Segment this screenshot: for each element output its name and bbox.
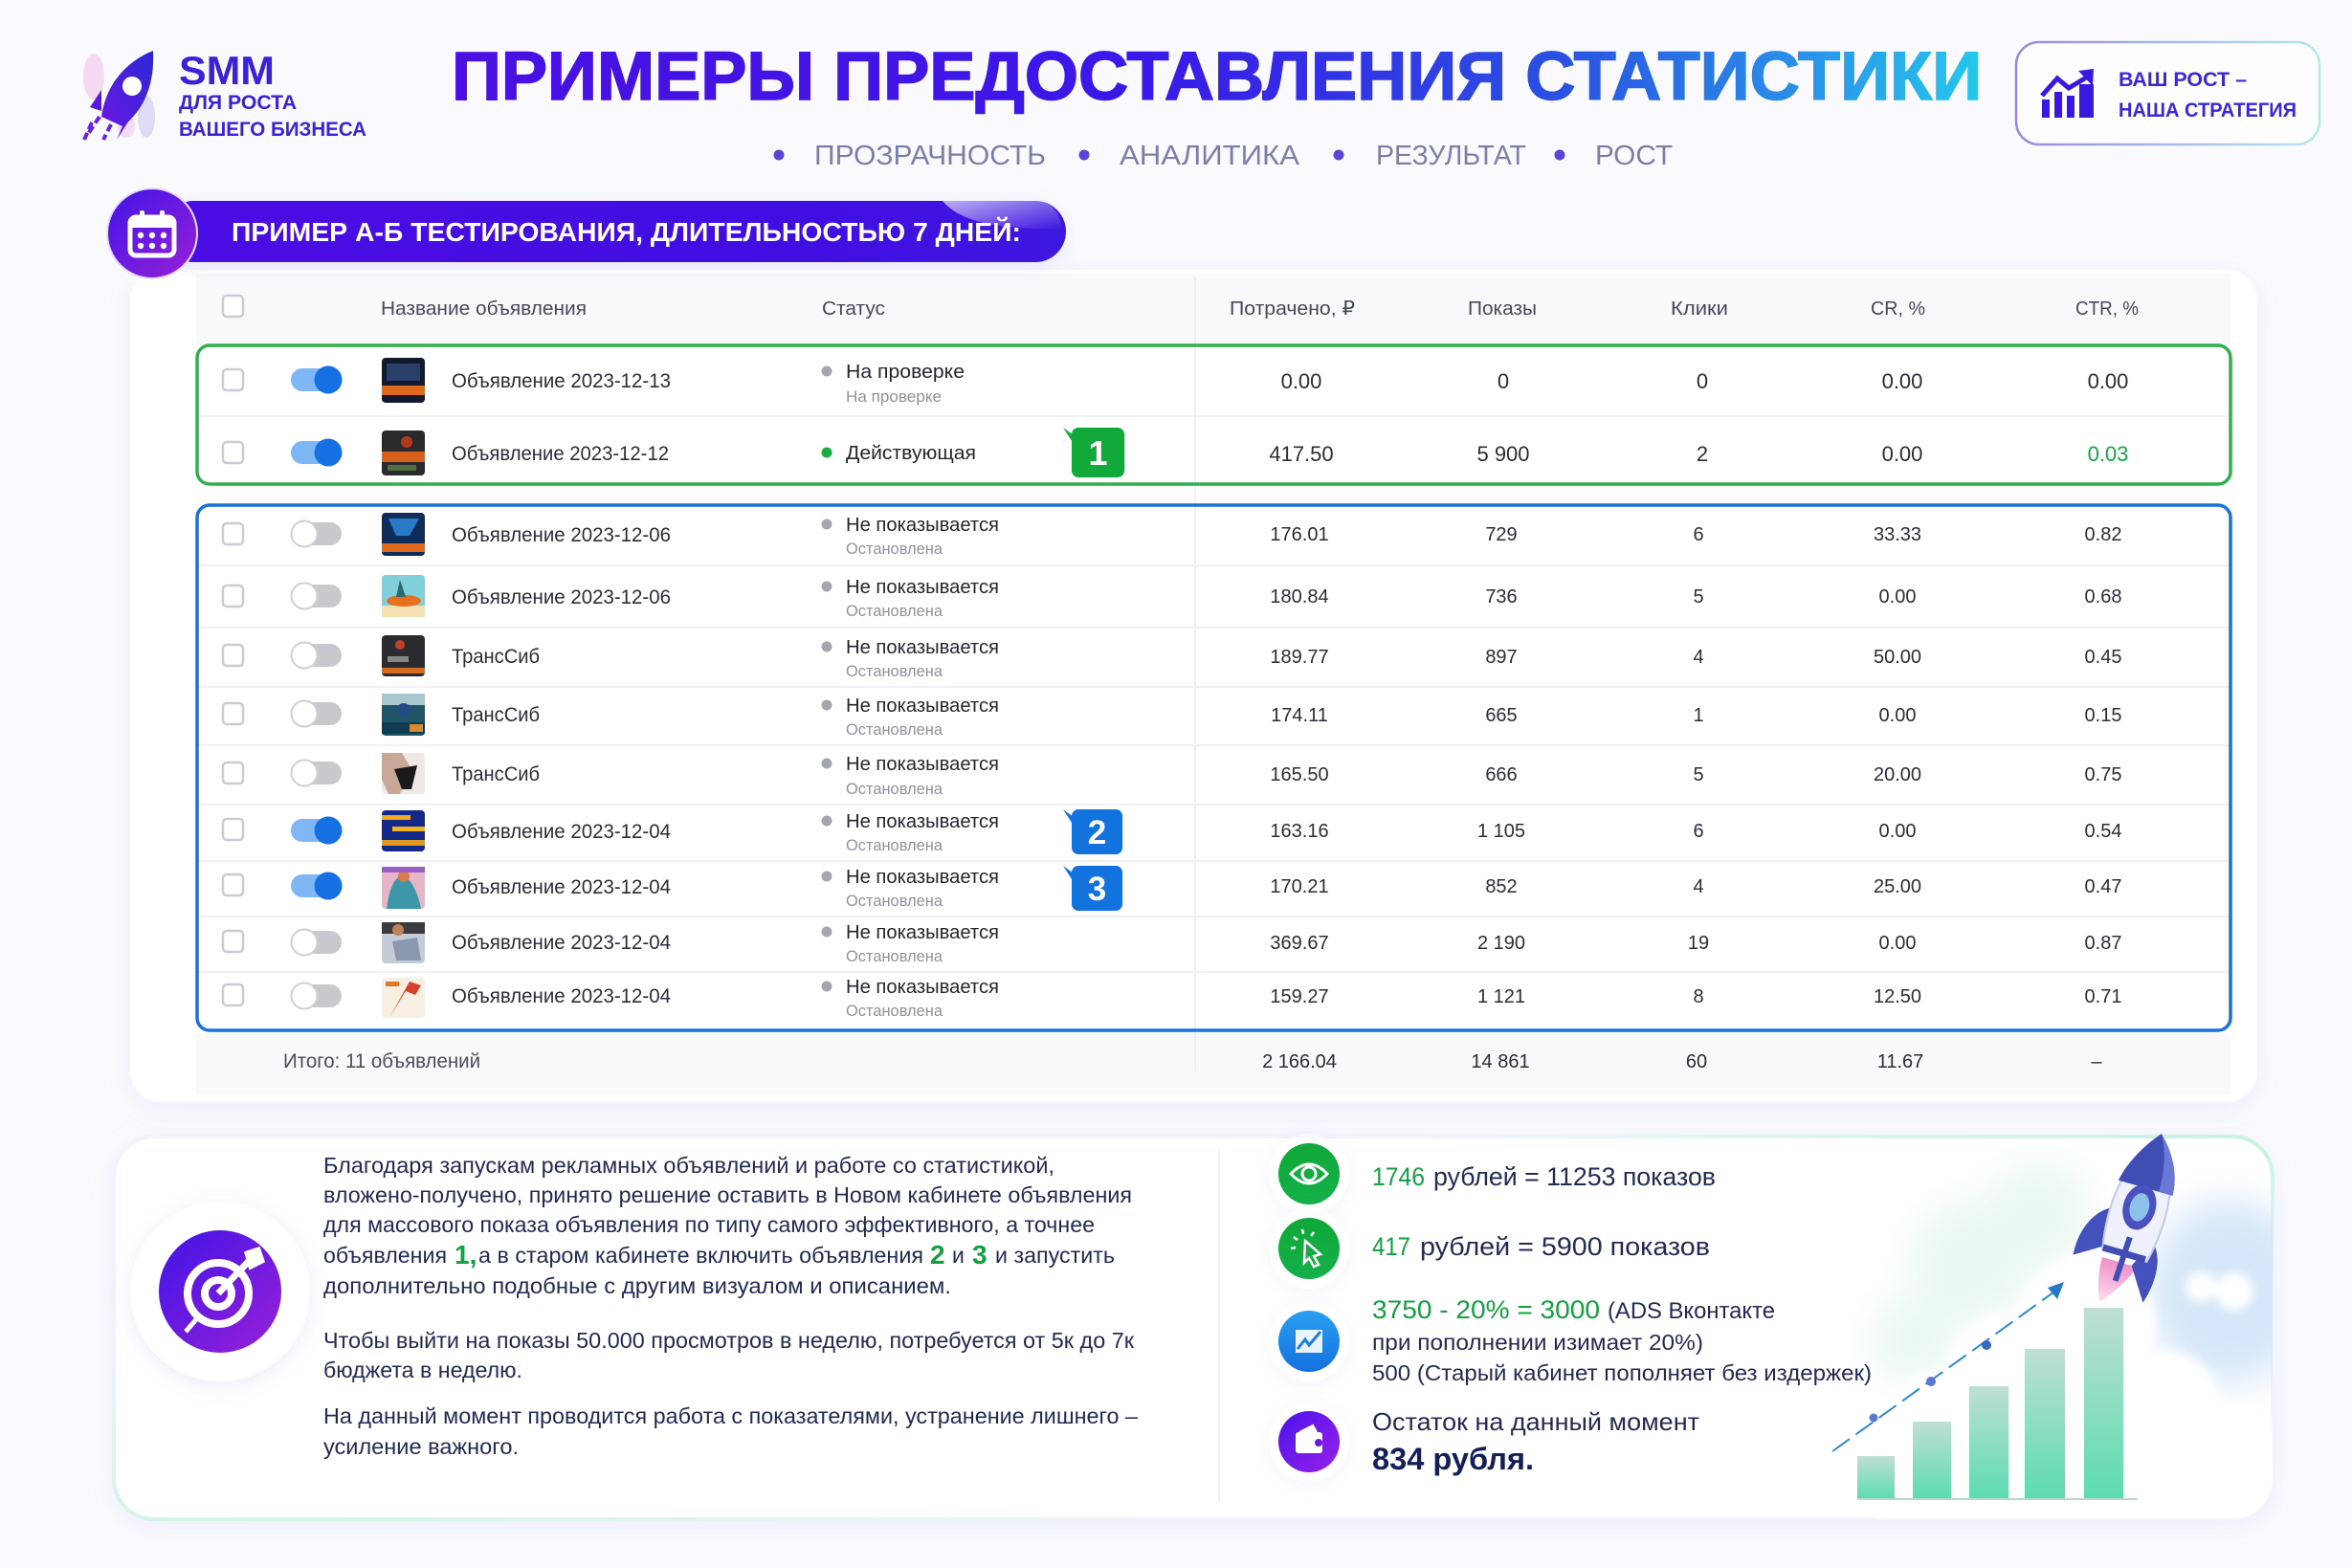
text block: decision: а в старом кабинете включить объявления [478,1243,923,1268]
row: ad 2023-12-13: 0.00 [1281,369,1321,393]
row: ad 2023-12-12: 417.50 [1269,442,1334,466]
badge 1: 1 [1088,433,1108,473]
row: ad 2023-12-04 (c): Остановлена [846,947,943,965]
text block: decision: 1, [455,1240,477,1270]
stat: ads top-up: при пополнении изимает 20%) [1372,1330,1703,1355]
text block: budget: бюджета в неделю. [323,1358,522,1382]
row: ad 2023-12-06 (b): 180.84 [1270,586,1329,607]
thumbnail [382,635,425,676]
stat: new cabinet spend: рублей = 5900 показов [1420,1232,1710,1261]
thumbnail [382,810,425,851]
row: ad 2023-12-06 (a): 176.01 [1270,524,1329,545]
icon: logo rocket [83,51,155,140]
arrow: dashed growth trend [1832,1282,2064,1451]
totals row: 11.67 [1877,1051,1923,1072]
row: ad 2023-12-04 (c): 369.67 [1270,933,1329,954]
row: TransSib 2: 1 [1693,705,1704,726]
thumbnail [382,431,425,475]
table header: Статус [822,298,885,320]
row: ad 2023-12-04 (selected 3): Не показывается [846,867,999,888]
row: ad 2023-12-13: 0 [1498,369,1509,393]
stat: ads top-up [1372,1295,1872,1385]
row: ad 2023-12-04 (selected 3): Остановлена [846,892,943,910]
row: TransSib 2: Остановлена [846,720,943,739]
row: TransSib 1: 50.00 [1874,647,1921,668]
logo [83,48,366,141]
logo text [179,48,366,141]
text block: decision: дополнительно подобные с другим визуалом и описанием. [323,1273,951,1298]
row: ad 2023-12-04 (c) [223,922,2121,965]
illustration: clouds background [1871,1162,2311,1521]
totals row: 2 166.04 [1262,1051,1337,1072]
subtitle keywords: РОСТ [1595,141,1673,171]
banner circle with calendar icon [107,188,197,278]
row: ad 2023-12-04 (selected 3): 170.21 [1270,876,1329,897]
row: ad 2023-12-04 (selected 2): Остановлена [846,836,943,854]
row: ad 2023-12-13: На проверке [846,362,965,383]
stat: new cabinet spend: 417 [1372,1232,1410,1261]
thumbnail [382,575,425,617]
row: TransSib 2: 665 [1485,705,1518,726]
totals row: – [2091,1051,2102,1072]
subtitle keywords: РЕЗУЛЬТАТ [1376,141,1526,171]
green highlight frame [197,345,2230,484]
subtitle keywords: ПРОЗРАЧНОСТЬ [814,141,1046,171]
row: TransSib 1: 189.77 [1270,647,1329,668]
row: ad 2023-12-06 (a): 729 [1485,524,1518,545]
totals row: 60 [1686,1051,1707,1072]
thumbnail [382,694,425,736]
icon: chart screen [1269,1301,1349,1381]
stat: spend vs impressions: рублей = 11253 показов [1433,1162,1716,1191]
row: TransSib 1: ТрансСиб [452,646,540,668]
row: ad 2023-12-06 (a) [223,513,2121,558]
table header: Показы [1468,298,1537,320]
row: TransSib 2: ТрансСиб [452,704,540,726]
badge: growth strategy [2016,42,2319,144]
row: ad 2023-12-12: 2 [1697,442,1708,466]
text block: current work: На данный момент проводится работа с показателями, устранение лишнего – [323,1403,1138,1428]
body [2098,1127,2186,1264]
title: ПРИМЕРЫ ПРЕДОСТАВЛЕНИЯ СТАТИСТИКИ [452,39,1982,115]
table header [223,296,2139,320]
row: ad 2023-12-04 (selected 3) [223,867,2121,910]
row: ad 2023-12-04 (selected 3): 25.00 [1874,876,1921,897]
row: ad 2023-12-04 (selected 3): 4 [1693,876,1704,897]
text block: decision: для массового показа объявления по типу самого эффективного, а точнее [323,1212,1095,1237]
row: ad 2023-12-06 (b): 0.00 [1879,586,1916,607]
thumbnail [382,867,425,909]
row: ad 2023-12-13: 0.00 [2088,369,2128,393]
row: TransSib 1: 0.45 [2085,647,2121,668]
centre fin [2116,1237,2130,1281]
row: ad 2023-12-04 (d): Не показывается [846,977,999,998]
row: TransSib 2 [223,694,2121,739]
row: ad 2023-12-12: Действующая [846,443,976,464]
row: ad 2023-12-04 (selected 3): 0.47 [2085,876,2121,897]
text block: decision: объявления [323,1243,447,1268]
row: ad 2023-12-04 (selected 2): 6 [1693,821,1704,842]
stat: ads top-up: (ADS Вконтакте [1608,1298,1775,1324]
stat: balance [1372,1407,1699,1476]
row: ad 2023-12-04 (c): Объявление 2023-12-04 [452,932,671,954]
row: TransSib 1: 897 [1485,647,1518,668]
row: ad 2023-12-06 (b): Объявление 2023-12-06 [452,586,671,608]
row: ad 2023-12-06 (b) [223,575,2121,620]
text block: decision: и [952,1243,965,1268]
row: ad 2023-12-04 (d): Остановлена [846,1002,943,1020]
table header: CTR, % [2075,298,2139,320]
row: ad 2023-12-04 (selected 3): 852 [1485,876,1518,897]
row: ad 2023-12-12: 5 900 [1476,442,1530,466]
row: TransSib 3: ТрансСиб [452,763,540,785]
icon: target [130,1202,310,1381]
row: ad 2023-12-06 (b): 5 [1693,586,1704,607]
row: TransSib 2: Не показывается [846,696,999,717]
row: ad 2023-12-04 (selected 2): Объявление 2023-12-04 [452,821,671,843]
row: ad 2023-12-04 (c): 0.87 [2085,933,2121,954]
right fin [2122,1238,2164,1304]
nose [2119,1126,2188,1196]
row: ad 2023-12-04 (selected 2): 1 105 [1477,821,1525,842]
bar chart [1857,1308,2138,1500]
logo text: SMM [179,48,275,93]
row: ad 2023-12-13: 0.00 [1882,369,1922,393]
row: ad 2023-12-13 [223,358,2128,406]
row: ad 2023-12-06 (a): Остановлена [846,540,943,558]
row: TransSib 1: 4 [1693,647,1704,668]
row: ad 2023-12-06 (a): Не показывается [846,515,999,536]
badge 2: 2 [1088,814,1106,851]
row: ad 2023-12-04 (c): 19 [1688,933,1709,954]
row: TransSib 2: 0.15 [2085,705,2121,726]
row: ad 2023-12-04 (d) [223,977,2121,1020]
icon: wallet [1269,1402,1349,1482]
nose highlight [2146,1134,2188,1196]
text block: decision: Благодаря запускам рекламных объявлений и работе со статистикой, [323,1153,1054,1178]
row: TransSib 3: 20.00 [1874,764,1921,785]
illustration: rocket [2062,1119,2193,1315]
row: TransSib 3: 165.50 [1270,764,1329,785]
row: ad 2023-12-04 (selected 2): 0.54 [2085,821,2121,842]
table panel [130,270,2257,1102]
row: TransSib 1: Не показывается [846,637,999,658]
row: ad 2023-12-04 (d): 12.50 [1874,986,1921,1007]
row: ad 2023-12-13: Объявление 2023-12-13 [452,370,671,392]
row: ad 2023-12-12: 0.00 [1882,442,1922,466]
row: ad 2023-12-12 [223,431,2128,475]
row: ad 2023-12-12: Объявление 2023-12-12 [452,443,669,465]
row: ad 2023-12-06 (a): 6 [1693,524,1704,545]
icon: cursor click [1269,1208,1349,1289]
thumbnail [382,358,425,403]
banner heading: ПРИМЕР А-Б ТЕСТИРОВАНИЯ, ДЛИТЕЛЬНОСТЬЮ 7 ДНЕЙ: [232,216,1021,247]
subtitle keywords [773,141,1673,171]
icon: eye [1269,1134,1349,1214]
stat: ads top-up: 3750 - 20% = 3000 [1372,1295,1600,1324]
badge 1 [1063,428,1124,477]
text block: current work [323,1403,1138,1459]
text block: decision: вложено-получено, принято решение оставить в Новом кабинете объявления [323,1182,1132,1207]
stat: spend vs impressions: 1746 [1372,1162,1425,1191]
stat: ads top-up: 500 (Старый кабинет пополняет без издержек) [1372,1360,1872,1385]
row: ad 2023-12-04 (d): Объявление 2023-12-04 [452,985,671,1007]
text block: current work: усиление важного. [323,1434,519,1459]
thumbnail [382,922,425,963]
badge 2 [1063,809,1122,854]
text block: decision: 2 [930,1240,945,1270]
row: TransSib 3: 666 [1485,764,1518,785]
table header: Потрачено, ₽ [1230,298,1355,320]
badge text [2119,69,2297,121]
row: ad 2023-12-06 (b): 0.68 [2085,586,2121,607]
flame [2090,1257,2137,1310]
row: ad 2023-12-04 (selected 2) [223,810,2121,854]
badge 3 [1063,866,1122,911]
row: TransSib 1: Остановлена [846,662,943,680]
table header: CR, % [1871,298,1925,320]
row: TransSib 3: 0.75 [2085,764,2121,785]
thumbnail [382,513,425,556]
panel: summary [114,1119,2311,1521]
blue highlight frame [197,505,2230,1030]
row: ad 2023-12-06 (a): 0.82 [2085,524,2121,545]
icon: growth chart [2042,69,2094,118]
badge text: НАША СТРАТЕГИЯ [2119,99,2297,121]
row: ad 2023-12-04 (selected 3): Объявление 2023-12-04 [452,876,671,898]
row: ad 2023-12-06 (b): Остановлена [846,602,943,620]
row: ad 2023-12-06 (b): Не показывается [846,577,999,598]
subtitle keywords: АНАЛИТИКА [1120,141,1300,171]
text block: budget [323,1328,1135,1382]
row: TransSib 3 [223,753,2121,798]
badge text: ВАШ РОСТ – [2119,69,2247,91]
totals row: 14 861 [1471,1051,1530,1072]
row: ad 2023-12-04 (selected 2): 0.00 [1879,821,1916,842]
row: ad 2023-12-13: На проверке [846,387,942,406]
badge 3: 3 [1088,871,1106,908]
row: ad 2023-12-04 (d): 8 [1693,986,1704,1007]
logo text: ВАШЕГО БИЗНЕСА [179,119,366,141]
row: ad 2023-12-04 (d): 0.71 [2085,986,2121,1007]
row: ad 2023-12-06 (a): Объявление 2023-12-06 [452,524,671,546]
row: ad 2023-12-12: 0.03 [2088,442,2128,466]
text block: budget: Чтобы выйти на показы 50.000 просмотров в неделю, потребуется от 5к до 7к [323,1328,1135,1353]
row: ad 2023-12-04 (c): 0.00 [1879,933,1916,954]
porthole [2118,1181,2162,1234]
thumbnail [382,978,425,1018]
row: TransSib 3: Не показывается [846,754,999,775]
row: TransSib 2: 0.00 [1879,705,1916,726]
row: TransSib 1 [223,635,2121,680]
row: ad 2023-12-06 (a): 33.33 [1874,524,1921,545]
row: TransSib 2: 174.11 [1271,705,1328,726]
row: ad 2023-12-06 (b): 736 [1485,586,1518,607]
logo text: ДЛЯ РОСТА [179,92,297,114]
row: ad 2023-12-04 (d): 1 121 [1477,986,1525,1007]
section banner [107,188,1066,278]
table header: Название объявления [381,298,587,320]
row: TransSib 3: 5 [1693,764,1704,785]
table header: Клики [1671,298,1728,320]
stat: balance: Остаток на данный момент [1372,1407,1699,1436]
thumbnail [382,753,425,794]
row: ad 2023-12-04 (d): 159.27 [1270,986,1329,1007]
totals row: Итого: 11 объявлений [283,1050,480,1072]
text block: decision [323,1153,1132,1298]
text block: decision: 3 [972,1240,987,1270]
row: ad 2023-12-13: 0 [1697,369,1708,393]
stat: balance: 834 рубля. [1372,1442,1534,1476]
row: ad 2023-12-04 (c): Не показывается [846,922,999,943]
text block: decision: и запустить [995,1243,1115,1268]
row: ad 2023-12-04 (selected 2): Не показывается [846,811,999,832]
row: ad 2023-12-04 (selected 2): 163.16 [1270,821,1329,842]
left fin [2073,1200,2119,1263]
row: TransSib 3: Остановлена [846,780,943,798]
totals row [283,1050,2102,1072]
row: ad 2023-12-04 (c): 2 190 [1477,933,1525,954]
